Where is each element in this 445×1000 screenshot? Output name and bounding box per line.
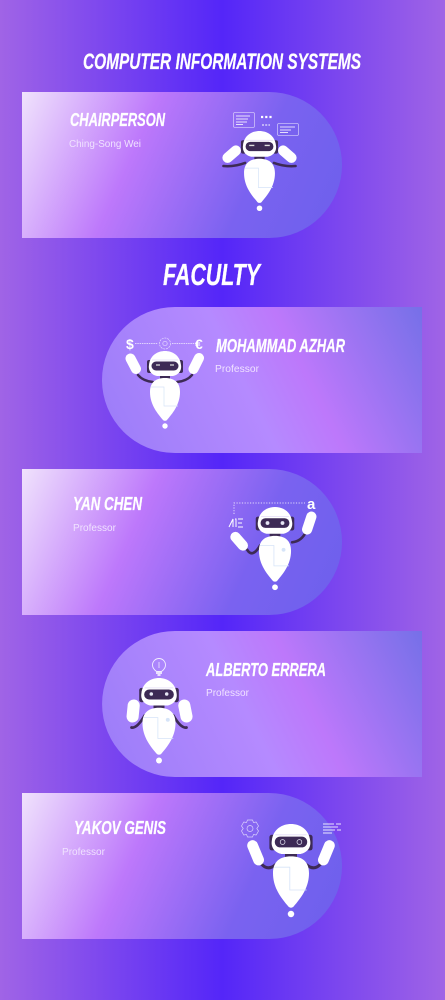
icon: robot with chat windows [223,131,296,211]
panel: Yan Chen [22,469,342,615]
icon: robot with light bulb [132,678,186,763]
name: Mohammad Azhar: MOHAMMAD AZHAR [216,336,345,356]
icon: currency line [126,336,203,352]
role: Professor [215,364,260,375]
icon: chat windows [234,112,298,136]
role: Professor [73,523,117,534]
icon: currency line: $ [126,336,134,352]
icon: translation line [229,496,316,527]
name: Yakov Genis: YAKOV GENIS [74,818,166,838]
icon: robot with settings [253,824,329,917]
icon: gear [242,820,258,837]
icon: text lines [323,824,341,833]
icon: currency line: € [195,336,203,352]
icon: light bulb [152,658,166,675]
panel: Alberto Errera [102,631,422,777]
role: Professor [206,688,250,699]
icon: robot with currency [130,351,199,429]
name: Ching-Song Wei: Ching-Song Wei [69,139,141,150]
heading: chairperson: CHAIRPERSON [70,110,166,130]
name: Alberto Errera: ALBERTO ERRERA [205,660,326,680]
role: Professor [62,847,106,858]
panel: Mohammad Azhar [102,307,422,453]
icon: robot with translation [235,507,311,590]
panel: Yakov Genis [22,793,342,939]
icon: translation line: a [307,496,316,513]
name: Yan Chen: YAN CHEN [73,494,143,514]
panel: chairperson [22,92,342,238]
heading: faculty: FACULTY [163,257,262,292]
